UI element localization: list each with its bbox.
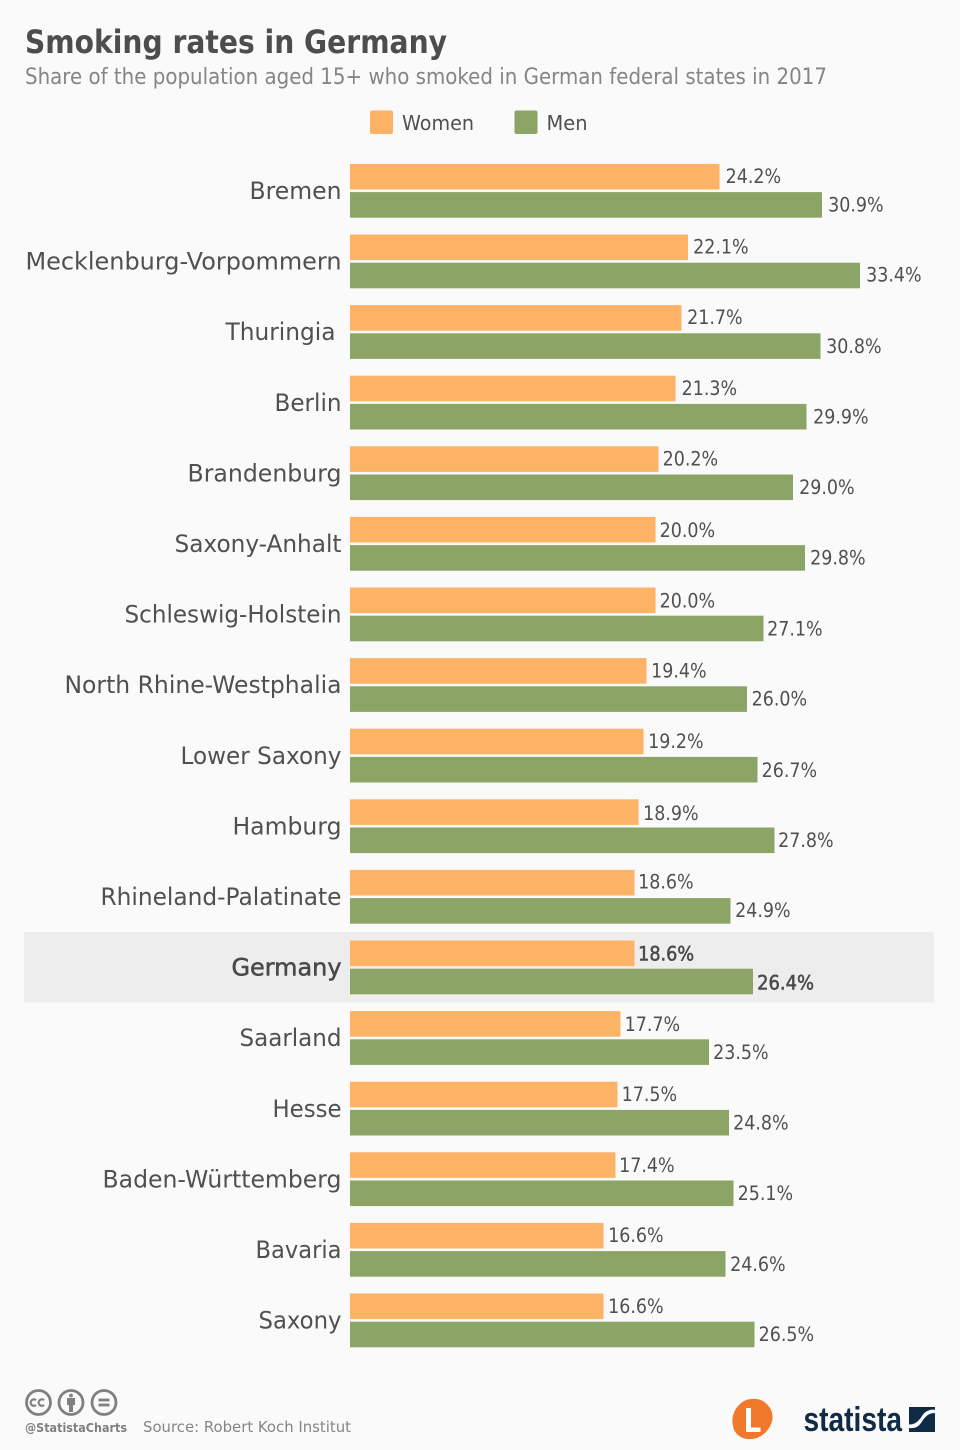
row: Hesse: 24.8% xyxy=(733,1112,789,1134)
row: Germany: 18.6% xyxy=(638,942,694,966)
row: Mecklenburg-Vorpommern: Mecklenburg-Vorpommern xyxy=(26,248,342,276)
legend swatch: men xyxy=(514,110,538,134)
row: North Rhine-Westphalia: North Rhine-Westphalia xyxy=(64,671,342,699)
row: Hamburg: 18.9% xyxy=(643,802,699,825)
row: Mecklenburg-Vorpommern xyxy=(26,234,922,288)
row: Bremen xyxy=(250,164,884,218)
row: Saxony: 26.5% xyxy=(759,1323,814,1346)
legend label: men: Men xyxy=(546,111,588,135)
legend label: women: Women xyxy=(402,111,474,135)
logo: orange L xyxy=(732,1399,773,1439)
row: Baden-Württemberg: Baden-Württemberg xyxy=(102,1165,342,1193)
row: Baden-Württemberg: 17.4% xyxy=(619,1154,675,1177)
row: Lower Saxony: 19.2% xyxy=(648,730,704,753)
logo: statista mark xyxy=(909,1407,935,1432)
row: Berlin: Berlin xyxy=(274,389,342,417)
row: North Rhine-Westphalia xyxy=(64,658,807,712)
row: Hamburg: Hamburg xyxy=(232,812,342,840)
row: Hamburg: 27.8% xyxy=(778,829,834,852)
handle: @StatistaCharts xyxy=(25,1420,127,1435)
row: Hamburg xyxy=(232,799,834,853)
row: Germany xyxy=(232,940,814,994)
highlight band: Germany xyxy=(24,932,934,1002)
row: Lower Saxony xyxy=(180,729,817,782)
row: Baden-Württemberg: 25.1% xyxy=(738,1182,793,1205)
row: Hesse: 17.5% xyxy=(622,1083,677,1106)
row: Saxony: Saxony xyxy=(258,1307,342,1335)
row: Bavaria: Bavaria xyxy=(256,1236,342,1264)
row: Schleswig-Holstein: 27.1% xyxy=(767,618,823,641)
row: Brandenburg: 29.0% xyxy=(799,476,855,499)
row: Bremen: 24.2% xyxy=(726,165,781,188)
row: Lower Saxony: Lower Saxony xyxy=(180,742,342,770)
row: Brandenburg: Brandenburg xyxy=(188,459,342,487)
row: Berlin xyxy=(274,376,869,430)
row: Thuringia: 21.7% xyxy=(687,306,743,329)
licence icons xyxy=(26,1390,116,1414)
icon: cc xyxy=(26,1390,50,1414)
row: Schleswig-Holstein: 20.0% xyxy=(660,590,715,613)
row: Baden-Württemberg xyxy=(102,1152,793,1206)
row: Rhineland-Palatinate: Rhineland-Palatinate xyxy=(100,883,342,911)
subtitle: Share of the population aged 15+ who smoked in German federal states in 2017 xyxy=(25,64,827,90)
row: Rhineland-Palatinate xyxy=(100,870,791,924)
row: Thuringia xyxy=(225,305,882,359)
row: Saxony-Anhalt: 20.0% xyxy=(660,519,715,542)
row: Rhineland-Palatinate: 18.6% xyxy=(638,870,694,894)
legend xyxy=(370,110,588,135)
row: Germany: Germany xyxy=(232,954,342,982)
row: Mecklenburg-Vorpommern: 33.4% xyxy=(866,264,922,287)
row: Berlin: 21.3% xyxy=(682,377,737,400)
title: Smoking rates in Germany xyxy=(25,23,447,61)
row: North Rhine-Westphalia: 19.4% xyxy=(651,660,707,682)
row: Saarland: 23.5% xyxy=(713,1041,769,1064)
row: Saxony xyxy=(258,1294,814,1347)
legend swatch: women xyxy=(370,110,393,134)
row: Bavaria: 24.6% xyxy=(730,1253,786,1276)
row: Brandenburg: 20.2% xyxy=(663,447,718,470)
icon: attribution xyxy=(59,1390,83,1414)
row: Saxony-Anhalt xyxy=(174,517,866,571)
row: Saxony-Anhalt: Saxony-Anhalt xyxy=(174,530,342,558)
row: Schleswig-Holstein xyxy=(124,588,823,641)
logo: statista wordmark: statista xyxy=(804,1401,903,1439)
row: Schleswig-Holstein: Schleswig-Holstein xyxy=(124,601,342,629)
row: Germany: 26.4% xyxy=(757,972,814,994)
row: Hesse: Hesse xyxy=(272,1095,342,1123)
row: Bavaria: 16.6% xyxy=(608,1224,664,1247)
row: Saxony-Anhalt: 29.8% xyxy=(810,547,866,570)
row: Bremen: 30.9% xyxy=(828,194,884,217)
row: Brandenburg xyxy=(188,446,855,500)
row: Rhineland-Palatinate: 24.9% xyxy=(735,899,791,922)
row: Berlin: 29.9% xyxy=(813,405,869,428)
row: Saxony: 16.6% xyxy=(608,1295,664,1318)
row: Thuringia: Thuringia xyxy=(225,318,336,346)
row: Saarland: 17.7% xyxy=(625,1013,680,1036)
row: Saarland xyxy=(240,1011,769,1065)
source: Source: Robert Koch Institut xyxy=(143,1418,351,1436)
row: Thuringia: 30.8% xyxy=(826,335,882,358)
row: North Rhine-Westphalia: 26.0% xyxy=(752,688,807,710)
bar chart xyxy=(26,164,922,1347)
row: Mecklenburg-Vorpommern: 22.1% xyxy=(693,236,749,259)
row: Saarland: Saarland xyxy=(240,1024,342,1052)
icon: no derivatives xyxy=(92,1390,116,1414)
row: Bremen: Bremen xyxy=(250,177,342,205)
row: Bavaria xyxy=(256,1223,786,1277)
row: Hesse xyxy=(272,1082,789,1136)
row: Lower Saxony: 26.7% xyxy=(762,759,817,782)
